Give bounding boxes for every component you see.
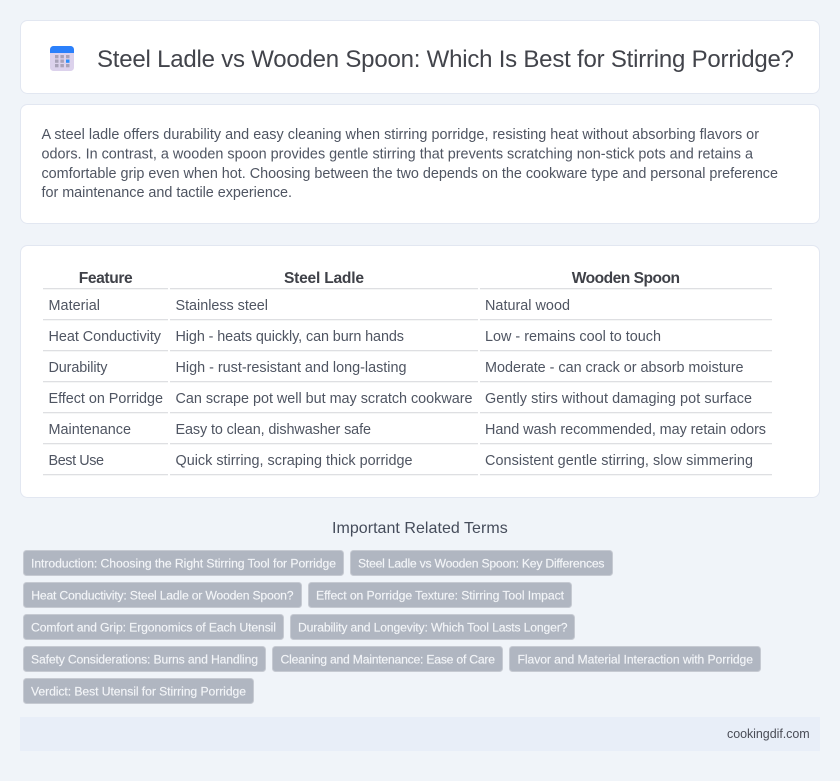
chip: key differences (350, 550, 612, 576)
panel: introduction (20, 104, 820, 224)
table row: durability: Durability (48, 360, 108, 376)
table row: effect on porridge (43, 391, 772, 413)
table row: best use: Consistent gentle stirring, slow simmering (485, 453, 753, 469)
table row: durability: High - rust-resistant and long-lasting (176, 360, 406, 376)
chip: verdict: Verdict: Best Utensil for Stirring Porridge (31, 684, 246, 698)
chip: porridge texture (308, 582, 572, 608)
table header row (43, 270, 772, 289)
chip: heat conductivity: Heat Conductivity: Steel Ladle or Wooden Spoon? (31, 588, 294, 602)
table header row: Feature (79, 270, 133, 287)
chip: key differences: Steel Ladle vs Wooden Spoon: Key Differences (358, 556, 604, 570)
footer source text: cookingdif.com (727, 727, 810, 741)
chip: porridge texture: Effect on Porridge Texture: Stirring Tool Impact (316, 588, 565, 602)
chip: durability (290, 614, 574, 640)
table row: material: Stainless steel (176, 298, 268, 314)
table row: durability: Moderate - can crack or absorb moisture (485, 360, 744, 376)
table header row: Wooden Spoon (572, 270, 680, 287)
table row: maintenance: Easy to clean, dishwasher safe (176, 422, 371, 438)
chip: verdict (24, 678, 254, 704)
table row: material: Natural wood (485, 298, 570, 314)
table row: heat conductivity: Low - remains cool to touch (485, 329, 661, 345)
icon: calendar (50, 46, 74, 71)
table row: durability (43, 360, 772, 382)
table row: heat conductivity: High - heats quickly, can burn hands (176, 329, 404, 345)
table row: best use: Quick stirring, scraping thick porridge (176, 453, 412, 469)
chip: cleaning (272, 646, 502, 672)
heading: related terms: Important Related Terms (332, 520, 508, 537)
table row: material (43, 298, 772, 320)
table row: effect on porridge: Effect on Porridge (48, 391, 163, 407)
chip: flavor: Flavor and Material Interaction with Porridge (518, 652, 753, 666)
table row: best use (43, 453, 772, 475)
chip: safety: Safety Considerations: Burns and Handling (31, 652, 258, 666)
table row: maintenance: Maintenance (48, 422, 131, 438)
chip: comfort and grip: Comfort and Grip: Ergonomics of Each Utensil (31, 620, 276, 634)
chip: introduction (24, 550, 344, 576)
text block: introduction paragraph: A steel ladle offers durability and easy cleaning when stirring porridge, resisting heat without absorbing flavors or (42, 127, 759, 143)
table header row: Steel Ladle (284, 270, 364, 287)
table row: material: Material (48, 298, 100, 314)
panel: header (20, 20, 820, 94)
table row: effect on porridge: Can scrape pot well but may scratch cookware (176, 391, 472, 407)
table row: heat conductivity (43, 329, 772, 351)
text block: introduction paragraph: odors. In contrast, a wooden spoon provides gentle stirring that prevents scratching non-stick pots and retains a (42, 146, 753, 162)
table row: heat conductivity: Heat Conductivity (48, 329, 162, 345)
table row: maintenance (43, 422, 772, 444)
footer (20, 717, 820, 751)
text block: introduction paragraph: comfortable grip even when hot. Choosing between the two depends on the cookware type and personal preference (42, 166, 778, 182)
chip: introduction: Introduction: Choosing the Right Stirring Tool for Porridge (31, 556, 336, 570)
chip: heat conductivity (24, 582, 302, 608)
table row: best use: Best Use (48, 453, 104, 469)
table row: maintenance: Hand wash recommended, may retain odors (485, 422, 766, 438)
chip: comfort and grip (24, 614, 284, 640)
text block: introduction paragraph: for maintenance and tactile experience. (42, 185, 292, 201)
text block: introduction paragraph (42, 127, 778, 201)
related terms chips (24, 550, 760, 704)
chip: cleaning: Cleaning and Maintenance: Ease of Care (280, 652, 495, 666)
chip: safety (24, 646, 266, 672)
chip: durability: Durability and Longevity: Which Tool Lasts Longer? (298, 620, 568, 634)
chip: flavor (510, 646, 760, 672)
table row: effect on porridge: Gently stirs without damaging pot surface (485, 391, 752, 407)
title: Steel Ladle vs Wooden Spoon: Which Is Best for Stirring Porridge? (97, 46, 794, 73)
panel: comparison table (20, 246, 820, 498)
